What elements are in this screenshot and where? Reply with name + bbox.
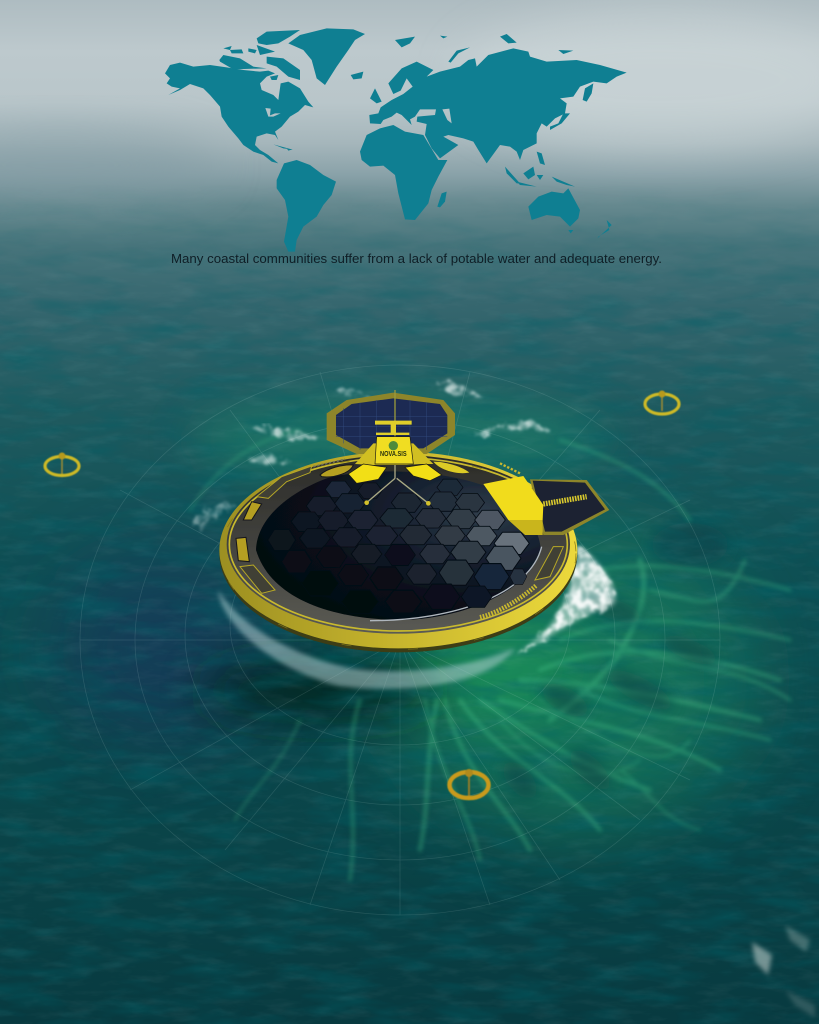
deck vents xyxy=(313,459,537,617)
Caribbean xyxy=(273,144,293,151)
dome hexagon cells xyxy=(268,479,529,613)
whitecaps bottom right xyxy=(752,925,815,1018)
side solar wing xyxy=(483,476,609,535)
Madagascar xyxy=(437,192,447,207)
yellow outer hull xyxy=(219,452,577,652)
Sakhalin and Japan xyxy=(550,83,593,130)
hexagon dome xyxy=(256,471,542,621)
Eurasia, Africa, Oceania xyxy=(360,34,627,238)
buoy left xyxy=(45,452,79,476)
buoy upper right xyxy=(645,390,679,414)
Greenland xyxy=(288,28,365,85)
floating platform xyxy=(219,390,609,652)
caption: Many coastal communities suffer from a lack of potable water and adequate energy. xyxy=(171,251,662,266)
Arctic islands xyxy=(219,30,300,80)
British Isles xyxy=(370,88,382,103)
Africa xyxy=(360,125,447,220)
central yellow tower with logo xyxy=(348,437,469,506)
dark patches among the streaks xyxy=(497,592,722,805)
Eurasia xyxy=(369,48,627,163)
Southeast Asian islands xyxy=(505,152,575,187)
foam around the hull xyxy=(192,381,616,689)
buoy bottom xyxy=(450,769,488,798)
Iceland xyxy=(351,72,363,79)
deck hatches xyxy=(236,465,563,593)
South America xyxy=(277,160,336,252)
world map xyxy=(165,28,627,252)
central yellow tower with logo: NOVA.SIS xyxy=(380,451,407,458)
green algae streaks in the water xyxy=(190,430,790,880)
Arctic islands xyxy=(395,34,573,63)
North America xyxy=(165,63,313,163)
rear solar panel xyxy=(327,390,455,454)
net grid around the platform xyxy=(80,365,720,915)
buoys xyxy=(45,390,679,798)
Americas xyxy=(165,28,365,252)
Tasmania and New Zealand xyxy=(568,220,612,238)
Australia xyxy=(528,188,580,227)
